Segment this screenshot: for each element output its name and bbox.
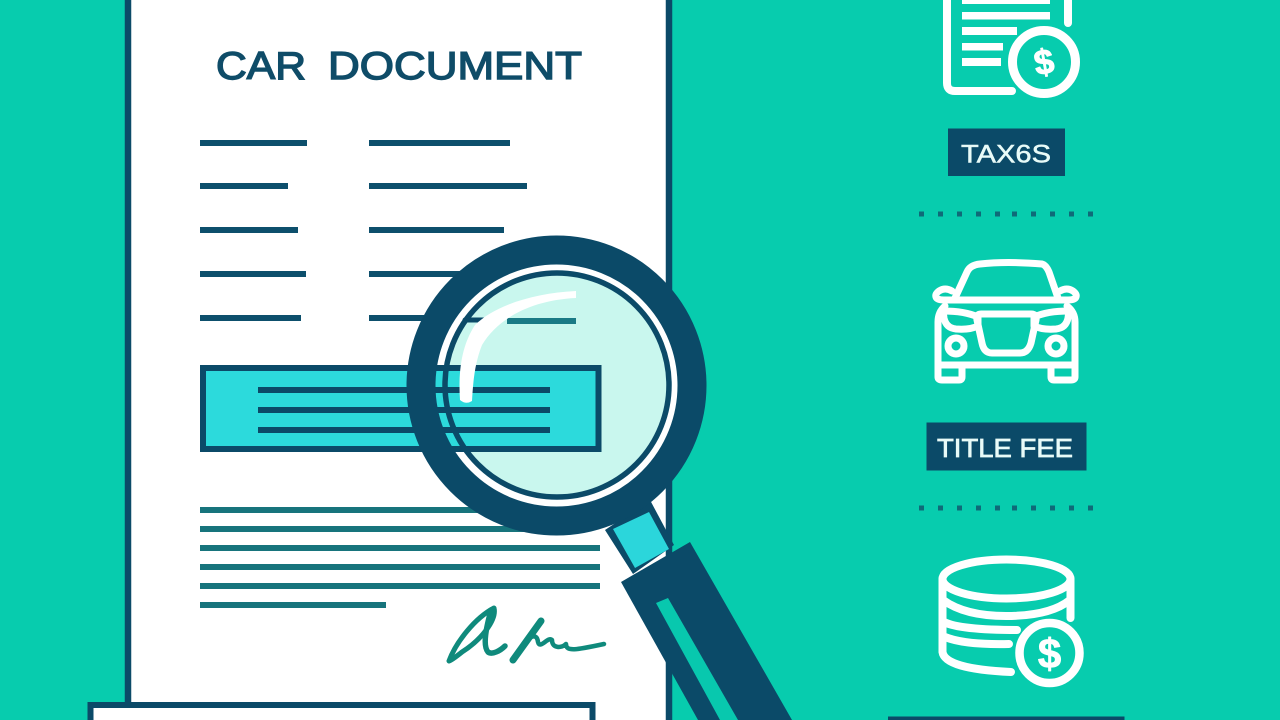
title: CAR — [216, 45, 306, 88]
panel: lower document sheet — [90, 705, 592, 720]
lens inner ring — [445, 273, 669, 497]
magnifier neck — [605, 500, 674, 574]
title: DOCUMENT — [328, 45, 582, 88]
lens glare — [460, 291, 576, 403]
icon: coin stack: $ — [1038, 630, 1061, 677]
panel: car document sheet — [128, 0, 669, 720]
title — [216, 45, 582, 88]
divider: dotted line two — [919, 506, 1093, 510]
label: title fee — [926, 422, 1086, 470]
magnified text line — [507, 318, 576, 324]
label: taxes — [948, 128, 1065, 176]
magnified line end — [465, 320, 493, 326]
label: taxes: TAX6S — [961, 140, 1051, 168]
icon: tax document: $ — [1031, 42, 1057, 83]
label: cropped third label — [888, 716, 1124, 720]
label: title fee: TITLE FEE — [937, 433, 1073, 463]
handle stripe — [656, 598, 738, 720]
text block: right column lines — [369, 140, 527, 321]
icon: tax document — [947, 0, 1076, 94]
icon: magnifying glass — [203, 250, 792, 720]
text block: left column lines — [200, 140, 307, 321]
signature — [449, 608, 604, 661]
icon: car front — [936, 262, 1076, 380]
highlighted field text lines — [258, 387, 550, 433]
highlighted field — [203, 368, 598, 449]
text block: paragraph lines — [200, 507, 600, 608]
icon: coin stack — [942, 560, 1080, 683]
lens — [434, 264, 678, 508]
divider: dotted line one — [919, 212, 1093, 216]
magnifier outer ring — [421, 250, 692, 521]
magnifier handle — [621, 542, 792, 720]
